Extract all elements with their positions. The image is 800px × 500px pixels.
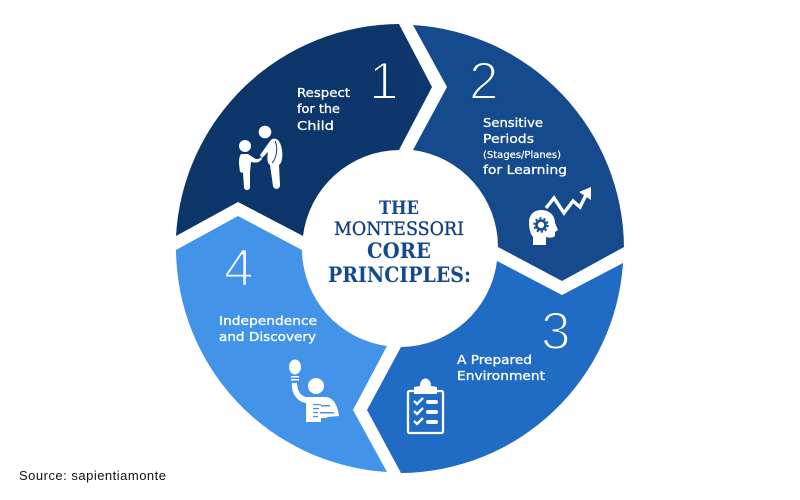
source caption: Source: sapientiamonte — [19, 468, 166, 483]
panel: segment 4 Independence and Discovery — [176, 216, 387, 472]
title: The Montessori Core Principles: CORE — [367, 238, 431, 263]
text: Respect for the Child: Respect — [297, 86, 350, 100]
text: Respect for the Child: for the — [297, 102, 340, 116]
text: Sensitive Periods (Stages/Planes) for Learning: Sensitive — [483, 116, 543, 130]
title: The Montessori Core Principles: MONTESSORI — [334, 218, 464, 240]
text: Sensitive Periods (Stages/Planes) for Learning: (Stages/Planes) — [483, 150, 561, 161]
text: Independence and Discovery: and Discovery — [219, 330, 316, 344]
icon: clipboard checklist — [408, 378, 443, 433]
number 1: 1 — [369, 52, 398, 111]
text: Sensitive Periods (Stages/Planes) for Learning — [483, 116, 567, 177]
text: A Prepared Environment: A Prepared — [457, 353, 532, 367]
text: Independence and Discovery — [219, 314, 317, 344]
number 3: 3 — [541, 302, 570, 361]
text: Sensitive Periods (Stages/Planes) for Learning: for Learning — [483, 163, 567, 177]
title: The Montessori Core Principles: PRINCIPLES: — [328, 262, 471, 287]
segment 4 shape — [176, 216, 387, 472]
icon: person raising lightbulb — [289, 360, 339, 422]
text: A Prepared Environment — [457, 353, 545, 383]
icon: head with gear and rising arrow — [529, 187, 591, 245]
title: The Montessori Core Principles — [328, 197, 471, 287]
segment 2 shape — [413, 25, 624, 281]
icon: adult and child holding hands — [239, 126, 282, 190]
segment 1 shape — [176, 24, 432, 236]
text: Respect for the Child — [297, 86, 350, 133]
panel: segment 1 Respect for the Child — [176, 24, 432, 236]
number 2: 2 — [469, 52, 498, 111]
number 4: 4 — [224, 239, 253, 298]
title: The Montessori Core Principles: THE — [379, 197, 419, 219]
text: Respect for the Child: Child — [297, 119, 334, 133]
text: A Prepared Environment: Environment — [457, 369, 545, 383]
text: Independence and Discovery: Independence — [219, 314, 317, 328]
panel: segment 3 A Prepared Environment — [367, 261, 623, 473]
segment 3 shape — [367, 261, 623, 473]
text: Sensitive Periods (Stages/Planes) for Learning: Periods — [483, 132, 534, 146]
panel: segment 2 Sensitive Periods — [413, 25, 624, 281]
